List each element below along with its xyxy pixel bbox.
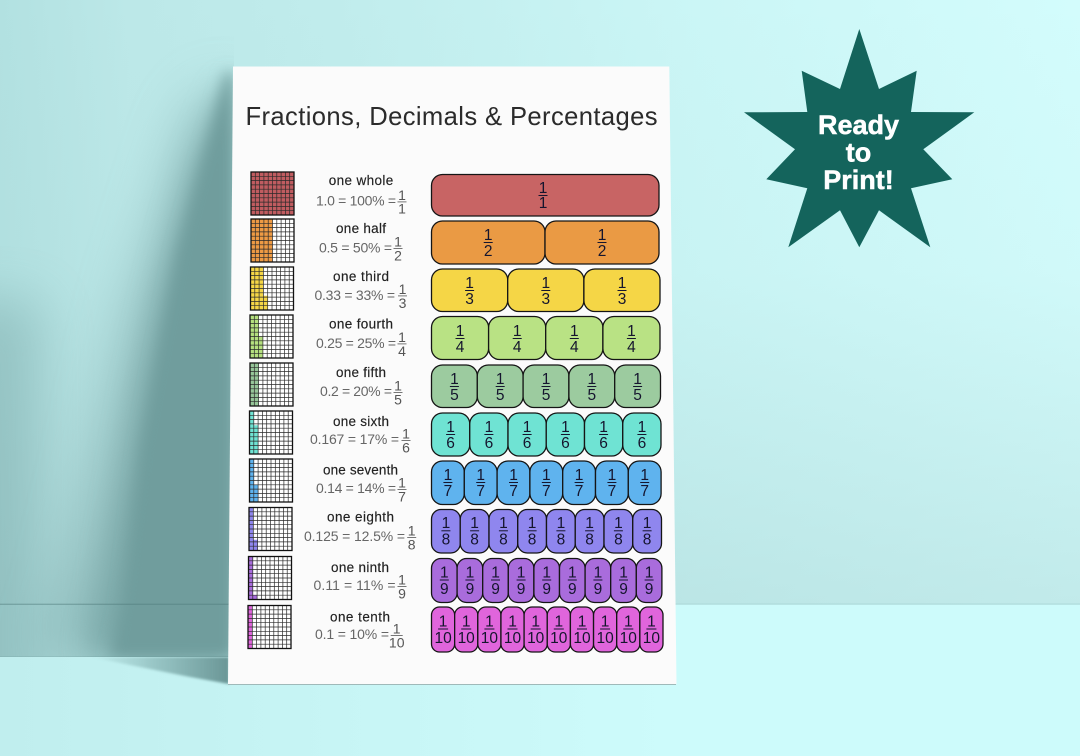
fraction bar: sixths: 6 <box>446 435 455 452</box>
fraction bar: eighths: 1 <box>528 515 536 532</box>
fraction bar: sixths: 1 <box>599 419 608 436</box>
title: Fractions, Decimals & Percentages <box>246 103 658 131</box>
equation: one sixth: 6 <box>402 440 410 456</box>
fraction bar: sevenths: 1 <box>640 467 649 484</box>
equation: one third: 0.33 = 33% = <box>314 287 395 303</box>
label: one third: one third <box>333 269 389 284</box>
grid: one whole <box>251 172 294 215</box>
fraction bar: tenths: 10 <box>434 630 452 647</box>
fraction bar: fourths: 4 <box>570 339 579 356</box>
row: one seventh <box>250 459 661 504</box>
fraction bar: sixths: 6 <box>638 435 646 452</box>
fraction bar: eighths: 1 <box>643 515 651 532</box>
equation: one eighth: 8 <box>408 536 416 552</box>
row: one whole <box>251 172 659 216</box>
fraction bar: sevenths: 7 <box>640 483 649 500</box>
equation: one fifth: 1 <box>394 378 402 394</box>
fraction bar: one whole: 1 <box>539 195 547 212</box>
fraction bar: eighths: 8 <box>499 532 508 548</box>
fraction bar: sevenths: 7 <box>608 483 616 500</box>
fraction bar: fifths: 1 <box>542 371 550 388</box>
fraction bar: sixths: 6 <box>561 435 570 452</box>
fraction bar: fourths: 1 <box>513 323 522 340</box>
fraction bar: ninths: 9 <box>517 581 525 598</box>
fraction bar: sixths: 1 <box>446 419 455 436</box>
row: one tenth <box>248 606 663 652</box>
fraction bar: tenths: 1 <box>439 614 447 630</box>
label: one eighth: one eighth <box>327 510 394 525</box>
fraction bar: halves: 1 <box>484 227 493 244</box>
fraction bar: tenths: 1 <box>508 614 517 630</box>
fraction bar: thirds: 1 <box>541 275 550 292</box>
equation: one fourth: 0.25 = 25% = <box>316 335 396 351</box>
fraction bar: ninths: 9 <box>466 581 474 598</box>
fraction bar: tenths: 1 <box>462 614 471 630</box>
grid: one fifth <box>250 363 293 406</box>
fraction bar: fifths: 5 <box>542 387 550 404</box>
fraction bar: one whole <box>432 174 659 216</box>
fraction bar: eighths: 1 <box>585 515 594 532</box>
badge text <box>818 110 899 195</box>
icon: star burst <box>744 29 974 247</box>
fraction bar: fourths: 4 <box>627 339 636 356</box>
fraction bar: eighths: 8 <box>614 532 623 548</box>
fraction bar: thirds: 1 <box>465 275 474 292</box>
fraction bar: ninths: 9 <box>568 581 577 598</box>
fraction bar: eighths: 8 <box>557 532 565 548</box>
poster shadow on floor <box>90 657 229 684</box>
equation: one tenth: 0.1 = 10% = <box>315 626 389 642</box>
fraction bar: sevenths: 1 <box>476 467 485 484</box>
fraction bar: ninths: 9 <box>594 581 602 598</box>
equation: one ninth: 9 <box>398 586 406 602</box>
fraction bar: tenths: 10 <box>620 630 637 647</box>
label: one fifth: one fifth <box>336 365 386 380</box>
equation: one tenth: 1 <box>393 620 401 636</box>
fraction bar: sixths: 1 <box>485 419 493 436</box>
fraction bar: tenths: 1 <box>578 614 586 630</box>
label: one sixth: one sixth <box>333 414 389 429</box>
equation: one whole: 1 <box>398 187 406 203</box>
fraction bar: tenths: 10 <box>504 630 521 647</box>
equation: one tenth <box>315 620 405 650</box>
fraction bar: eighths: 1 <box>470 515 479 532</box>
grid: one ninth <box>248 556 292 600</box>
fraction bar: sevenths: 7 <box>444 483 452 500</box>
grid: one tenth <box>248 606 291 648</box>
fraction bar: ninths: 9 <box>645 581 653 598</box>
equation: one seventh: 1 <box>398 474 406 490</box>
grid: one sixth <box>250 411 292 454</box>
fraction bar: eighths: 1 <box>499 515 508 532</box>
fraction bar: sevenths: 1 <box>575 467 583 484</box>
fraction bar: thirds: 1 <box>618 275 626 292</box>
fraction bar: sixths <box>432 413 661 456</box>
fraction bar: eighths: 1 <box>614 515 623 532</box>
fraction bar: sevenths <box>432 461 661 504</box>
equation: one eighth: 0.125 = 12.5% = <box>304 528 405 544</box>
fraction bar: sevenths: 7 <box>575 483 583 500</box>
fraction bar: ninths: 9 <box>491 581 500 598</box>
fraction bar: fourths: 1 <box>627 323 636 340</box>
fraction bar: tenths: 10 <box>550 630 568 647</box>
badge text: Print! <box>823 165 894 195</box>
fraction bar: tenths: 10 <box>573 630 591 647</box>
fraction bar: fourths: 4 <box>456 339 465 356</box>
fraction bar: fifths: 1 <box>633 371 642 388</box>
equation: one third: 1 <box>399 281 407 297</box>
fraction bar: fifths: 5 <box>450 387 459 404</box>
fraction bar: tenths: 10 <box>596 630 614 647</box>
fraction bar: sevenths: 1 <box>509 467 518 484</box>
row: one fifth <box>250 363 660 408</box>
poster shadow on wall <box>0 72 234 720</box>
grid: one eighth <box>249 508 292 550</box>
row: one third <box>250 267 660 312</box>
equation: one sixth: 0.167 = 17% = <box>310 431 399 447</box>
fraction bar: tenths: 10 <box>643 630 660 647</box>
equation: one eighth: 1 <box>408 522 416 538</box>
equation: one fifth: 0.2 = 20% = <box>320 383 392 399</box>
fraction bar: eighths: 8 <box>643 532 651 548</box>
fraction bar: sixths: 1 <box>523 419 531 436</box>
equation: one sixth <box>310 426 410 456</box>
fraction bar: tenths: 1 <box>554 614 563 630</box>
fraction bar: ninths: 1 <box>542 564 551 582</box>
fraction bar: fifths: 5 <box>496 387 505 404</box>
grid: one seventh <box>250 459 292 502</box>
fraction bar: fifths: 1 <box>587 371 596 388</box>
equation: one fourth: 1 <box>398 329 406 345</box>
fraction bar: sixths: 6 <box>599 435 608 452</box>
fraction bar: halves: 1 <box>598 227 606 244</box>
fraction bar: one whole: 1 <box>539 180 547 197</box>
row: one fourth <box>250 315 660 360</box>
fraction bar: thirds: 3 <box>618 291 626 308</box>
equation: one half: 2 <box>394 248 402 264</box>
equation: one whole <box>316 187 406 216</box>
background floor <box>0 604 1080 756</box>
fraction bar: sevenths: 1 <box>542 467 551 484</box>
badge text: Ready <box>818 110 899 140</box>
fraction bar: sevenths: 7 <box>509 483 518 500</box>
fraction bar: thirds <box>432 269 660 312</box>
fraction bar: eighths: 8 <box>470 532 479 548</box>
label: one seventh: one seventh <box>323 462 398 478</box>
fraction bar: fourths: 4 <box>513 339 522 356</box>
label: one whole: one whole <box>329 173 393 188</box>
fraction bar: fourths: 1 <box>456 323 464 340</box>
fraction bar: fifths: 1 <box>450 371 459 388</box>
grid: one fourth <box>250 315 293 358</box>
fraction bar: tenths: 1 <box>601 614 609 630</box>
fraction bar: eighths: 1 <box>442 515 450 532</box>
fraction bar: tenths: 1 <box>531 614 540 630</box>
fraction bar: eighths <box>432 510 662 553</box>
fraction bar: eighths: 8 <box>528 532 536 548</box>
fraction bar: fifths: 5 <box>587 387 596 404</box>
equation: one seventh: 7 <box>398 488 406 504</box>
fraction bar: tenths: 1 <box>485 614 494 630</box>
fraction bar: eighths: 8 <box>585 532 594 548</box>
fraction bar: sixths: 1 <box>561 419 570 436</box>
row: one ninth <box>248 556 662 602</box>
fraction bar: ninths: 1 <box>619 564 628 582</box>
equation: one fifth: 5 <box>394 392 402 408</box>
fraction bar: ninths: 9 <box>542 581 551 598</box>
fraction bar: fifths: 5 <box>633 387 642 404</box>
equation: one ninth <box>314 572 406 602</box>
equation: one half <box>319 234 402 264</box>
fraction bar: halves: 2 <box>484 243 493 260</box>
label: one tenth: one tenth <box>330 610 390 625</box>
fraction bar: halves <box>432 221 659 264</box>
fraction bar: tenths <box>432 607 663 652</box>
fraction bar: ninths: 1 <box>491 564 500 582</box>
row: one sixth <box>250 411 661 456</box>
fraction bar: ninths: 1 <box>645 564 653 582</box>
badge text: to <box>846 138 871 168</box>
fraction bar: thirds: 3 <box>465 291 474 308</box>
fraction bar: tenths: 10 <box>481 630 498 647</box>
fraction bar: tenths: 1 <box>647 614 656 630</box>
equation: one ninth: 0.11 = 11% = <box>314 577 396 593</box>
fraction bar: sevenths: 7 <box>476 483 485 500</box>
fraction bar: halves: 2 <box>598 243 606 260</box>
fraction bar: sevenths: 1 <box>608 467 616 484</box>
fraction bar: fourths: 1 <box>570 323 579 340</box>
fraction bar: thirds: 3 <box>541 291 550 308</box>
equation: one half: 0.5 = 50% = <box>319 240 392 256</box>
equation: one fourth: 4 <box>398 343 406 359</box>
row: one eighth <box>249 508 662 553</box>
equation: one third <box>314 281 407 311</box>
fraction bar: tenths: 10 <box>527 630 545 647</box>
fraction bar: sevenths: 1 <box>444 467 452 484</box>
fraction bar: sixths: 6 <box>523 435 531 452</box>
label: one ninth: one ninth <box>331 560 389 575</box>
fraction bar: ninths: 9 <box>619 581 628 598</box>
fraction bar: ninths: 9 <box>440 581 449 598</box>
row: one half <box>251 219 659 264</box>
fraction bar: fifths: 1 <box>496 371 505 388</box>
equation: one tenth: 10 <box>389 634 405 650</box>
fraction bar: ninths: 1 <box>568 564 577 582</box>
equation: one eighth <box>304 522 416 552</box>
grid: one third <box>250 267 294 310</box>
equation: one ninth: 1 <box>398 572 406 588</box>
fraction bar: ninths: 1 <box>517 564 525 582</box>
equation: one fifth <box>320 378 402 408</box>
equation: one whole: 1 <box>398 200 406 216</box>
fraction bar: tenths: 10 <box>458 630 475 647</box>
equation: one seventh: 0.14 = 14% = <box>316 480 396 496</box>
poster sheet <box>228 66 676 684</box>
fraction bar: ninths <box>432 558 662 602</box>
label: one fourth: one fourth <box>329 316 393 332</box>
badge: ready to print <box>744 29 974 247</box>
equation: one sixth: 1 <box>402 426 410 442</box>
grid: one half <box>251 219 294 262</box>
fraction bar: eighths: 8 <box>442 532 450 548</box>
fraction bar: eighths: 1 <box>557 515 565 532</box>
equation: one seventh <box>316 474 406 504</box>
fraction bar: sevenths: 7 <box>542 483 551 500</box>
fraction bar: ninths: 1 <box>594 564 602 582</box>
fraction bar: ninths: 1 <box>466 564 474 582</box>
fraction bar: fourths <box>432 316 660 360</box>
fraction bar: fifths <box>432 365 660 408</box>
fraction bar: tenths: 1 <box>624 614 633 630</box>
equation: one half: 1 <box>394 234 402 250</box>
equation: one whole: 1.0 = 100% = <box>316 192 396 208</box>
fraction bar: ninths: 1 <box>440 564 449 582</box>
fraction bar: sixths: 6 <box>485 435 493 452</box>
equation: one third: 3 <box>399 295 407 311</box>
fraction bar: sixths: 1 <box>638 419 646 436</box>
equation: one fourth <box>316 329 406 359</box>
label: one half: one half <box>336 221 386 236</box>
